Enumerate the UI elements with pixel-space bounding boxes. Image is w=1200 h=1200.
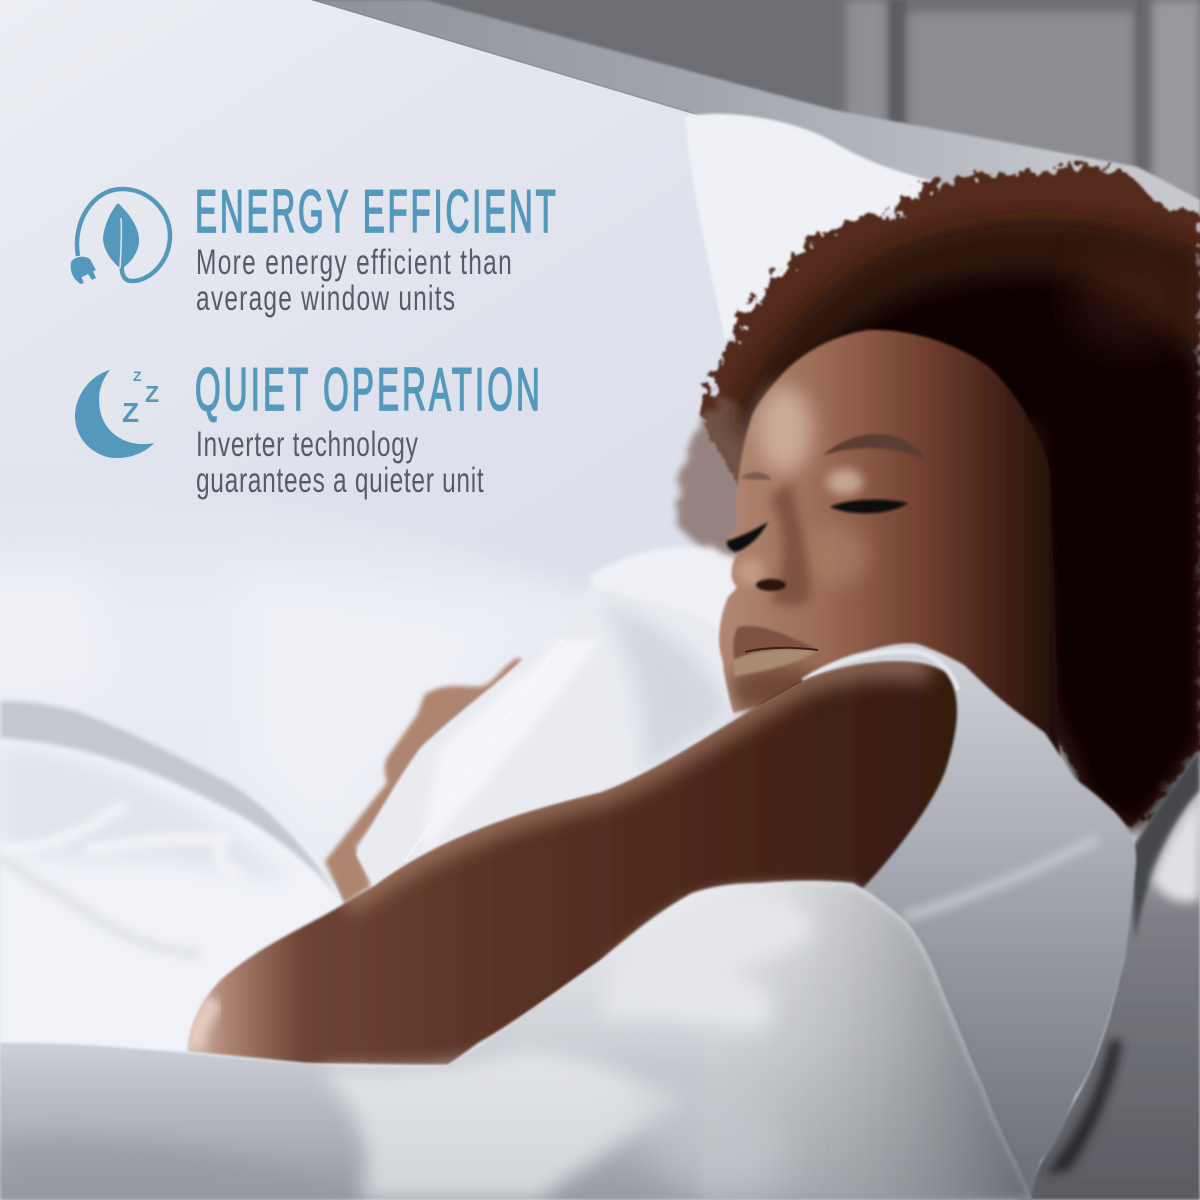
leaf bbox=[103, 203, 139, 269]
icon: crescent moon with z letters bbox=[75, 368, 159, 458]
nostril bbox=[756, 579, 786, 591]
icon: crescent moon with z letters: Z bbox=[145, 381, 159, 407]
gap shadow between shirt and pillow bbox=[1045, 1040, 1122, 1175]
cheek highlight bbox=[801, 525, 869, 585]
duvet quilted folds bbox=[0, 805, 240, 875]
fuzzy lower-left curls bbox=[676, 395, 765, 560]
eye closed right bbox=[830, 500, 908, 513]
crescent moon bbox=[75, 370, 154, 458]
nose highlight bbox=[736, 558, 764, 586]
text: quiet operation description bbox=[196, 426, 484, 500]
shirt bbox=[803, 643, 1136, 1200]
eyebrow left bbox=[740, 472, 772, 480]
hair bbox=[676, 166, 1200, 830]
eyebrow right bbox=[823, 434, 928, 462]
pillow under head bbox=[590, 547, 745, 720]
face and neck bbox=[719, 330, 1060, 760]
front duvet bbox=[0, 881, 1032, 1200]
text: quiet operation description: Inverter technology bbox=[196, 426, 419, 464]
background wall and shelf bbox=[300, 0, 1200, 260]
shirt seam bbox=[903, 838, 1098, 918]
duvet top edge band bbox=[0, 701, 343, 904]
eye closed left bbox=[727, 522, 768, 552]
arm bbox=[188, 662, 957, 1065]
lower lip bbox=[733, 649, 818, 676]
cord circle bbox=[77, 189, 170, 281]
background pillow bbox=[685, 114, 940, 340]
right pillow bbox=[1020, 748, 1200, 1200]
forehead highlight bbox=[757, 386, 813, 474]
shirt strap highlight bbox=[803, 651, 958, 690]
hugged pillow bbox=[356, 588, 733, 886]
text: energy efficient description: More energy efficient than bbox=[196, 244, 512, 282]
bed surface behind subject bbox=[0, 470, 720, 900]
text: energy efficient description bbox=[196, 244, 512, 318]
duvet quilt shaded area bbox=[0, 745, 290, 880]
left arm and hand behind pillow bbox=[325, 658, 524, 904]
heading: quiet operation: QUIET OPERATION bbox=[195, 357, 540, 424]
duvet lit patches bbox=[600, 895, 815, 1030]
nose shadow bbox=[770, 480, 810, 606]
eyelid highlight bbox=[827, 469, 863, 495]
arm top-edge highlight bbox=[344, 665, 930, 904]
headboard top band bbox=[311, 0, 1200, 300]
mouth line bbox=[745, 648, 818, 652]
text: quiet operation description: guarantees a quieter unit bbox=[196, 462, 484, 500]
left duvet bbox=[0, 701, 343, 1051]
leaf vein bbox=[120, 218, 121, 268]
text: energy efficient description: average window units bbox=[196, 280, 455, 318]
chin shadow bbox=[725, 665, 825, 715]
plug bbox=[71, 257, 96, 280]
headboard bbox=[0, 0, 1000, 640]
z letters: Z bbox=[122, 397, 139, 428]
icon: plug and leaf energy bbox=[71, 189, 170, 284]
upper lip bbox=[733, 626, 818, 660]
heading: energy efficient: ENERGY EFFICIENT bbox=[195, 179, 556, 246]
icon: crescent moon with z letters: Z bbox=[133, 368, 142, 384]
